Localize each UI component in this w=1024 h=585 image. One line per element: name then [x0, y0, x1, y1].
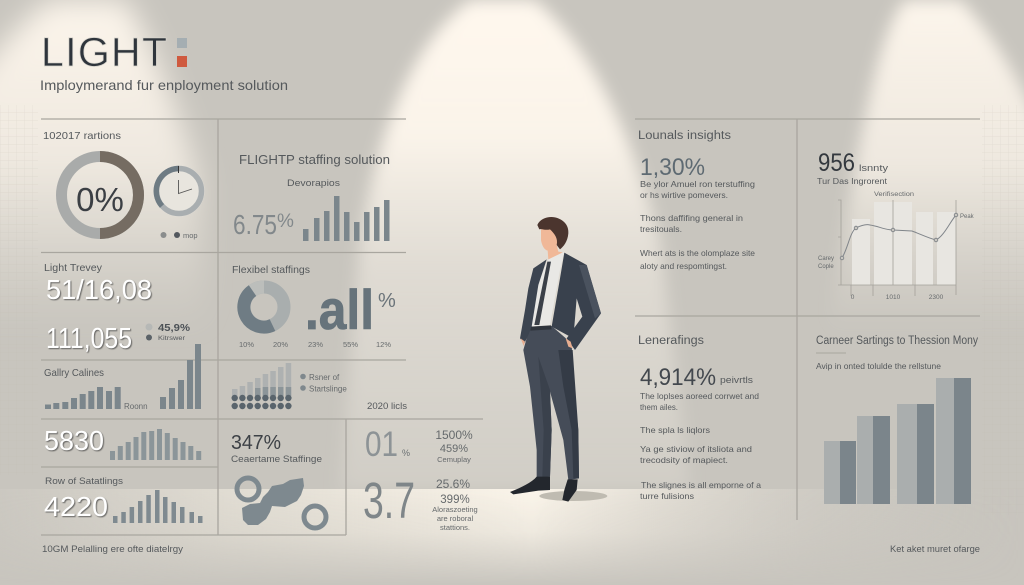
bar chart: 5830: [110, 429, 201, 460]
trouser shading left: [538, 357, 552, 477]
tie: [534, 262, 551, 325]
panel: lenerafings: them ailes.: [640, 402, 678, 412]
panel: lenerafings: Ya ge stiviow of itsliota and: [640, 444, 752, 454]
light bars: [232, 363, 291, 396]
panel: lenerafings: turre fulisions: [640, 491, 694, 501]
panel: large figures: 3.7: [363, 472, 415, 529]
panel: flexible staffings: Flexibel staffings: [232, 264, 310, 276]
footer right: Ket aket muret ofarge: [890, 544, 980, 554]
line chart: 0: [851, 294, 855, 301]
panel: career sartings bar chart: Carneer Sartings to Thession Mony: [816, 335, 978, 347]
panel: lenerafings: The spla ls liqlors: [640, 425, 710, 435]
line chart: Carey: [818, 256, 834, 262]
panel: lounals insights: Thons daffifing general in: [640, 213, 743, 223]
panel: 956 line chart: Tur Das Ingrorent: [817, 176, 888, 186]
panel: rations donut: [43, 130, 138, 234]
jacket right: [552, 253, 601, 350]
stat: 4220: Row of Satatlings: [45, 476, 123, 487]
subtitle: Imploymerand fur enployment solution: [40, 77, 288, 93]
panel: lenerafings: trecodsity of mapiect.: [640, 455, 728, 465]
panel: stacked dot chart: Startslinge: [309, 384, 347, 394]
panel: lenerafings: 4,914%: [640, 364, 716, 391]
panel: 956 line chart: 956: [818, 149, 855, 177]
belt: [530, 325, 552, 331]
panel: light trevey stats: 51/16,08: [46, 274, 152, 305]
line chart: Peak: [960, 214, 975, 220]
dots: [232, 395, 292, 409]
line chart: [818, 191, 975, 301]
panel: gallery columns: [44, 344, 201, 411]
panel: large figures: 1500%: [435, 428, 473, 442]
panel: staffing solution: Devorapios: [287, 178, 340, 189]
panel: flexible staffings: 10%: [239, 340, 254, 349]
legend: clock: [160, 231, 198, 240]
trouser shading right: [558, 350, 579, 478]
panel: lounals insights: 1,30%: [640, 154, 705, 181]
neck and face: [541, 229, 564, 262]
panel: large figures: Aloraszoeting: [432, 505, 478, 514]
panel: large figures: 01: [365, 425, 398, 464]
panel: large figures: are roboral: [437, 514, 473, 523]
panel: career staffing map: [231, 432, 326, 528]
panel: large figures: stattions.: [440, 523, 470, 532]
hand right: [566, 338, 573, 348]
shoe left: [510, 477, 550, 494]
panel: gallery columns: Roonn: [124, 402, 148, 411]
panel: light trevey stats: 111,055: [46, 323, 132, 355]
shoe right: [562, 479, 578, 502]
icon: ring left: [237, 478, 259, 500]
hair: [537, 217, 568, 249]
icon: clock gauge: [154, 166, 204, 216]
stat: 5830: 5830: [44, 425, 104, 456]
person in suit: [510, 217, 607, 502]
panel: staffing solution: FLIGHTP staffing solution: [239, 153, 390, 167]
panel: large figures: 459%: [440, 443, 468, 455]
panel grid lines: right: [635, 119, 980, 520]
panel: light trevey stats: Light Trevey: [44, 263, 102, 274]
panel: large figures: 399%: [440, 494, 470, 506]
title: LIGHT logo: LIGHT: [41, 29, 167, 75]
mid bars: [255, 387, 291, 396]
shirt: [531, 252, 564, 327]
stat: 4220: 4220: [44, 491, 108, 522]
panel: staffing solution: 6.75: [233, 209, 277, 240]
panel: flexible staffings: 55%: [343, 340, 358, 349]
panel: career staffing map: 347%: [231, 432, 281, 454]
panel grid lines: left: [41, 119, 483, 535]
line chart: 2300: [929, 294, 944, 301]
panel: flexible staffings: 20%: [273, 340, 288, 349]
panel: career sartings bar chart: [816, 335, 978, 504]
grouped bars: [824, 378, 971, 504]
panel: flexible staffings: [232, 264, 396, 349]
panel: lounals insights: tresitouals.: [640, 224, 682, 234]
panel: staffing solution: [233, 153, 390, 241]
panel: lounals insights: Be ylor Amuel ron terstuffing: [640, 179, 755, 189]
shadow: [539, 491, 607, 501]
icon: ring right: [304, 506, 326, 528]
donut chart: 0%: [76, 181, 124, 218]
panel: lounals insights: or hs wirtive pomevers.: [640, 190, 728, 200]
bar chart: gallery rising: [160, 344, 201, 409]
panel: stacked dot chart: 2020 licls: [367, 401, 407, 412]
line chart: Cople: [818, 264, 834, 270]
panel: staffing solution: %: [277, 211, 294, 232]
footer left: 10GM Pelalling ere ofte diatelrgy: [42, 544, 184, 554]
donut chart: flexible: [244, 287, 284, 327]
stat: 5830: [44, 425, 201, 460]
panel: lounals insights: [638, 130, 755, 271]
hand left: [521, 338, 525, 346]
panel: flexible staffings: 23%: [308, 340, 323, 349]
stat: 4220: [44, 476, 202, 523]
panel: lenerafings: peivrtls: [720, 375, 754, 385]
panel: light trevey stats: [44, 263, 190, 355]
panel: flexible staffings: .all: [305, 278, 374, 341]
panel: large figures: Cemuplay: [437, 455, 471, 464]
panel: large figures: [363, 425, 478, 532]
panel: stacked dot chart: [232, 363, 407, 412]
panel: lenerafings: Lenerafings: [638, 335, 704, 347]
line chart: 1010: [886, 294, 901, 301]
panel: career sartings bar chart: Avip in onted tolulde the rellstune: [816, 361, 941, 371]
bar chart: staffing: [303, 196, 390, 241]
panel: light trevey stats: 45,9%: [158, 323, 190, 334]
panel: lenerafings: [638, 335, 761, 501]
icon: map blob: [242, 478, 304, 525]
panel: 956 line chart: [817, 149, 975, 301]
panel: lounals insights: Whert ats is the olomplaze site: [640, 248, 755, 258]
panel: gallery columns: Gallry Calines: [44, 367, 104, 379]
bar chart: gallery small: [45, 387, 121, 409]
jacket left: [520, 259, 547, 343]
bar chart: 4220: [113, 490, 202, 523]
trousers: [523, 326, 579, 480]
panel: lounals insights: Lounals insights: [638, 130, 731, 142]
panel: stacked dot chart: Rsner of: [309, 373, 340, 382]
line chart: Verifisection: [874, 191, 914, 198]
panel: lounals insights: aloty and respomtingst.: [640, 261, 727, 271]
panel: large figures: %: [402, 448, 410, 458]
sleeve highlight: [579, 265, 601, 318]
panel: lenerafings: The slignes is all emporne of a: [641, 480, 761, 490]
panel: lenerafings: The loplses aoreed corrwet and: [640, 391, 759, 401]
panel: 956 line chart: lsnnty: [859, 163, 888, 174]
panel: large figures: 25.6%: [436, 477, 470, 491]
panel: flexible staffings: 12%: [376, 340, 391, 349]
panel: career staffing map: Ceaertame Staffinge: [231, 454, 322, 465]
panel: rations donut: 102017 rartions: [43, 130, 121, 142]
legend: clock: mop: [183, 231, 198, 240]
panel: light trevey stats: Kitrswer: [158, 335, 186, 342]
panel: flexible staffings: %: [378, 290, 396, 312]
